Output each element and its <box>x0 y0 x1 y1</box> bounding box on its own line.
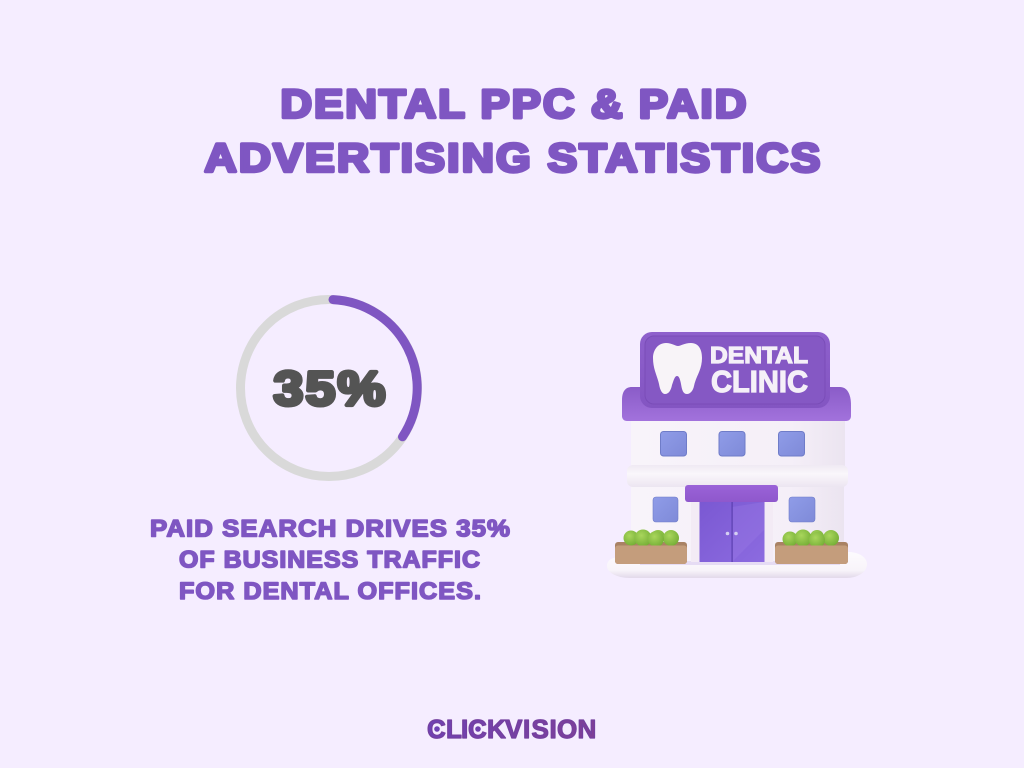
right bushes <box>782 530 839 548</box>
statistic description <box>150 516 511 605</box>
building base <box>607 552 867 578</box>
door frame <box>691 500 773 562</box>
statistic description: FOR DENTAL OFFICES. <box>179 578 482 605</box>
roof <box>622 387 851 421</box>
logo: clickvision: CLICKVISION <box>427 714 596 744</box>
icon: dental clinic building <box>607 332 867 578</box>
lower wall <box>631 485 844 561</box>
door <box>700 500 764 562</box>
upper windows <box>660 432 804 456</box>
donut chart: 35% <box>240 300 418 476</box>
sign text: clinic: CLINIC <box>711 364 808 399</box>
right planter front <box>775 546 848 564</box>
lower windows <box>653 497 815 522</box>
upper wall <box>631 418 845 468</box>
left planter back <box>615 542 687 564</box>
title <box>204 82 822 180</box>
donut value: 35% <box>274 363 388 416</box>
statistic description: OF BUSINESS TRAFFIC <box>179 546 481 574</box>
title: ADVERTISING STATISTICS <box>204 136 822 180</box>
icon: tooth <box>653 343 702 394</box>
sign text: dental: DENTAL <box>710 342 808 368</box>
left bushes <box>624 530 679 547</box>
sign board <box>640 332 830 408</box>
right planter back <box>775 542 848 564</box>
left planter front <box>615 546 687 564</box>
title: DENTAL PPC & PAID <box>280 82 748 126</box>
statistic description: PAID SEARCH DRIVES 35% <box>150 516 511 542</box>
middle band <box>627 465 848 487</box>
awning <box>685 485 778 502</box>
